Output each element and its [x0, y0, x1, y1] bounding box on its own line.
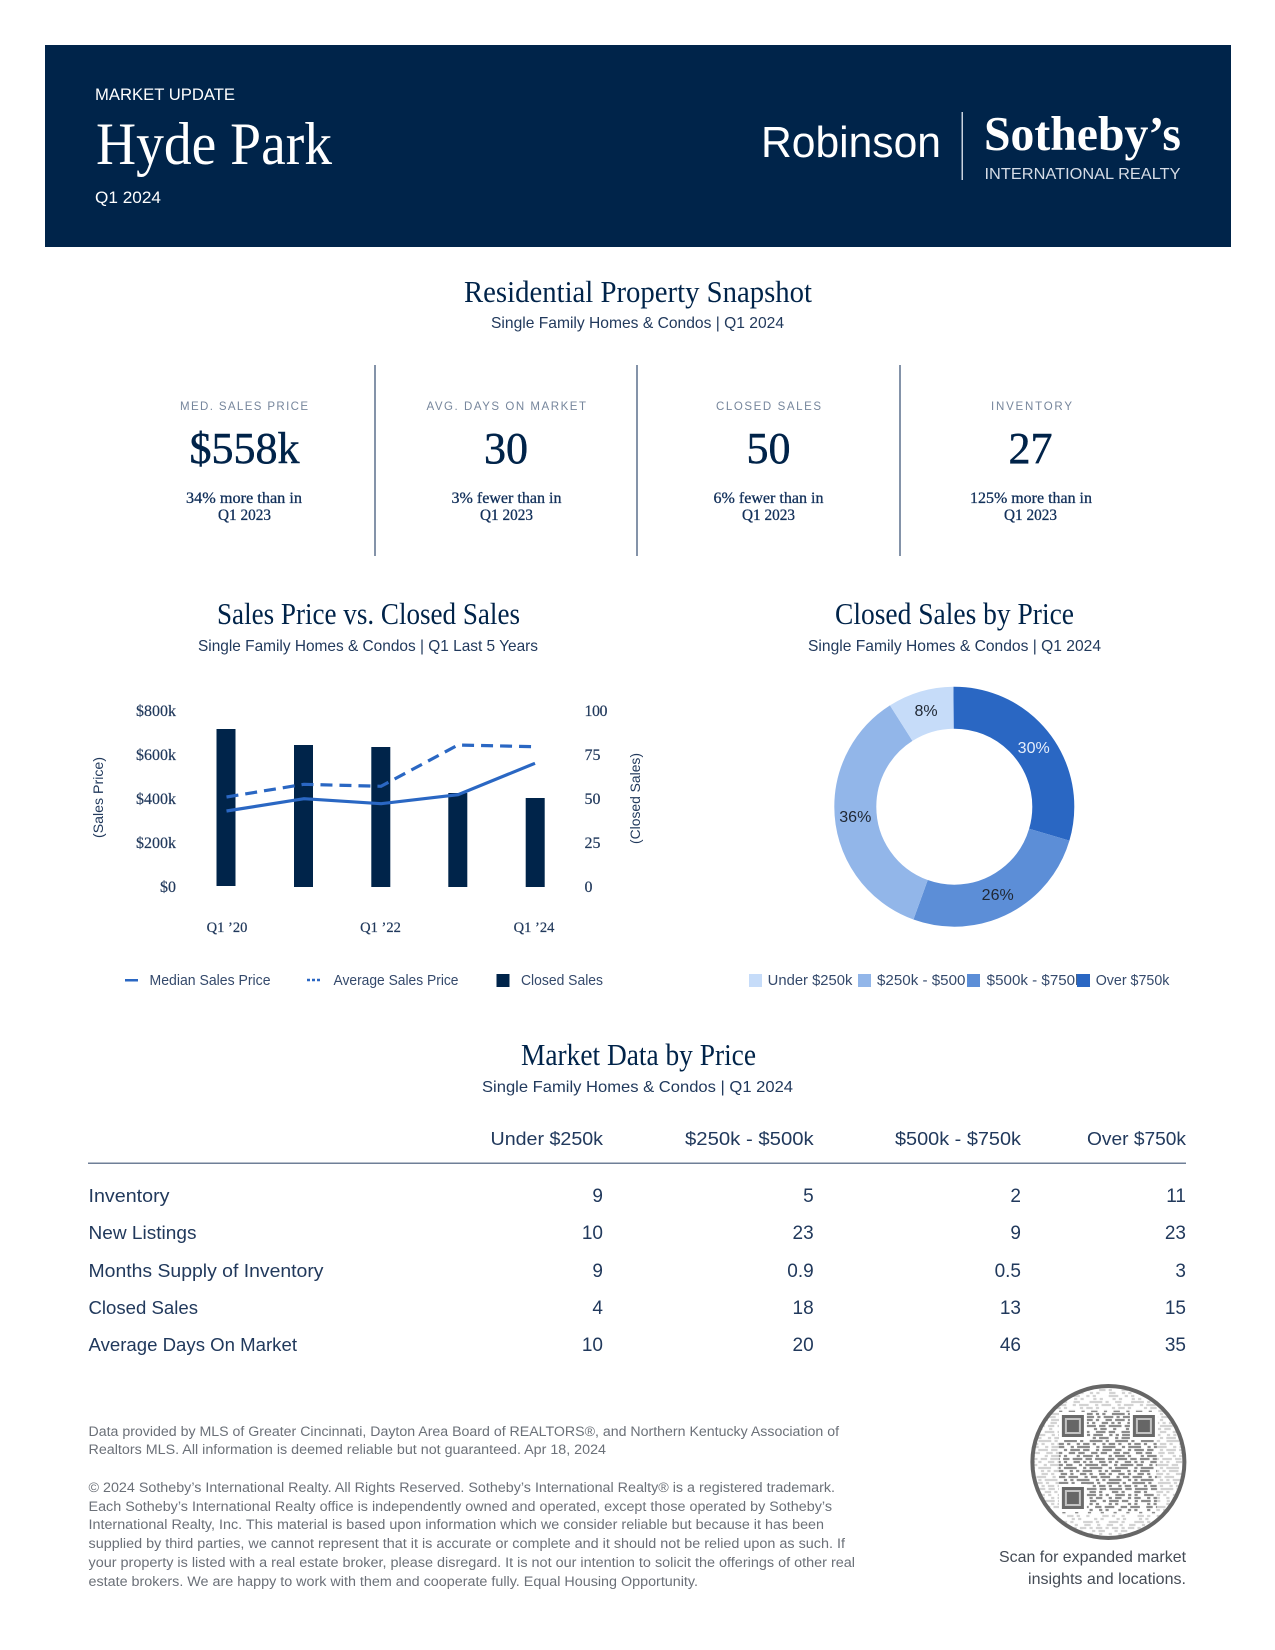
- row: new listings: 23: [793, 1223, 814, 1244]
- legal disclaimer: estate brokers. We are happy to work with them and cooperate fully. Equal Housing Opportunity.: [88, 1574, 698, 1589]
- row: average days on market: 46: [1000, 1335, 1021, 1356]
- x axis labels: Q1 ’20: [207, 920, 247, 936]
- right axis labels: 25: [584, 835, 600, 852]
- legal disclaimer: [88, 1480, 855, 1589]
- line: median sales price: [226, 763, 535, 811]
- combo chart: sales price vs closed sales: [91, 703, 643, 936]
- heading: sales price vs closed sales: Single Family Homes & Condos | Q1 Last 5 Years: [198, 638, 538, 655]
- stat: median sales price: Q1 2023: [218, 507, 271, 524]
- header banner: [45, 45, 1231, 247]
- legal disclaimer: © 2024 Sotheby’s International Realty. All Rights Reserved. Sotheby’s International Realty® is a registered trademark.: [88, 1480, 835, 1495]
- donut legend: Under $250k: [768, 973, 853, 989]
- row: average days on market: 35: [1165, 1335, 1186, 1356]
- table header row: [88, 1128, 1187, 1164]
- stat: inventory: 125% more than in: [970, 490, 1092, 507]
- row: inventory: [88, 1185, 1186, 1207]
- right axis title: (Closed Sales): [628, 753, 643, 844]
- stat dividers: [374, 365, 901, 556]
- row: closed sales: 13: [1000, 1298, 1021, 1319]
- stat: median sales price: [180, 401, 308, 524]
- donut legend: [749, 974, 1170, 987]
- data source note: [88, 1424, 839, 1457]
- row: new listings: 9: [1010, 1223, 1021, 1244]
- row: closed sales: Closed Sales: [88, 1297, 198, 1318]
- logo: Robinson Sotheby's International Realty: Robinson: [761, 118, 941, 167]
- right axis labels: 0: [584, 879, 592, 896]
- data table: market data by price: [88, 1128, 1187, 1356]
- donut percentage labels: 8%: [914, 703, 938, 720]
- row: months supply of inventory: Months Supply of Inventory: [88, 1260, 324, 1281]
- heading: sales price vs closed sales: [198, 596, 538, 655]
- donut percentage labels: 36%: [839, 809, 871, 826]
- stat: average days on market: 30: [484, 424, 528, 473]
- row: inventory: 11: [1166, 1186, 1186, 1207]
- row: months supply of inventory: 0.5: [995, 1261, 1021, 1282]
- table header row: $500k - $750k: [895, 1128, 1022, 1149]
- donut chart: closed sales by price: [839, 703, 1053, 906]
- right axis labels: 100: [584, 703, 608, 720]
- stat: inventory: INVENTORY: [991, 401, 1072, 413]
- row: average days on market: 20: [793, 1335, 814, 1356]
- bars: closed sales: [216, 729, 545, 887]
- stat: closed sales: CLOSED SALES: [716, 401, 821, 413]
- donut legend: $250k - $500k: [877, 973, 974, 989]
- chart legend: Average Sales Price: [334, 973, 458, 989]
- heading: closed sales by price: Closed Sales by Price: [835, 596, 1074, 631]
- heading: closed sales by price: [808, 596, 1101, 655]
- chart legend: Closed Sales: [521, 973, 603, 989]
- row: closed sales: 18: [793, 1298, 814, 1319]
- legal disclaimer: your property is listed with a real estate broker, please disregard. It is not our intention to solicit the offerings of other real: [88, 1555, 855, 1570]
- stat: closed sales: 50: [746, 424, 790, 473]
- stat: average days on market: [426, 401, 586, 524]
- row: inventory: 9: [592, 1186, 603, 1207]
- logo: Robinson Sotheby's International Realty: INTERNATIONAL REALTY: [984, 166, 1181, 183]
- stat: closed sales: Q1 2023: [742, 507, 795, 524]
- stat: inventory: [970, 401, 1092, 524]
- right axis labels: 75: [584, 747, 600, 764]
- line: average sales price: [226, 745, 535, 797]
- row: inventory: 2: [1010, 1186, 1021, 1207]
- left axis labels: $600k: [136, 747, 176, 764]
- heading: market data by price: [482, 1037, 793, 1096]
- table header row: $250k - $500k: [685, 1128, 815, 1149]
- heading: sales price vs closed sales: Sales Price vs. Closed Sales: [217, 596, 520, 631]
- chart legend: Median Sales Price: [150, 973, 270, 989]
- QR caption: [999, 1549, 1187, 1588]
- heading: residential property snapshot: Single Family Homes & Condos | Q1 2024: [491, 315, 784, 332]
- table header row: Under $250k: [490, 1128, 604, 1149]
- left axis labels: [136, 703, 176, 896]
- title: Hyde Park: Hyde Park: [96, 111, 332, 177]
- left axis labels: $400k: [136, 791, 176, 808]
- donut legend: Over $750k: [1096, 973, 1170, 989]
- row: closed sales: 15: [1165, 1298, 1186, 1319]
- stat: average days on market: AVG. DAYS ON MARKET: [426, 401, 586, 413]
- stat: inventory: Q1 2023: [1004, 507, 1057, 524]
- x axis labels: Q1 ’24: [514, 920, 555, 936]
- row: inventory: Inventory: [88, 1185, 170, 1206]
- logo: Robinson Sotheby's International Realty: [761, 106, 1181, 183]
- row: closed sales: 4: [592, 1298, 603, 1319]
- row: months supply of inventory: 3: [1175, 1261, 1186, 1282]
- data source note: Data provided by MLS of Greater Cincinnati, Dayton Area Board of REALTORS®, and Northern Kentucky Association of: [88, 1424, 839, 1439]
- QR caption: insights and locations.: [1028, 1571, 1186, 1588]
- donut legend: $500k - $750k: [987, 973, 1083, 989]
- heading: residential property snapshot: [464, 274, 812, 332]
- logo: Robinson Sotheby's International Realty: Sotheby’s: [984, 106, 1181, 161]
- stat: average days on market: 3% fewer than in: [452, 490, 562, 507]
- data source note: Realtors MLS. All information is deemed reliable but not guaranteed. Apr 18, 2024: [88, 1442, 607, 1457]
- legal disclaimer: supplied by third parties, we cannot represent that it is accurate or complete and it should not be relied upon as such. If: [88, 1536, 845, 1551]
- kicker: market update: MARKET UPDATE: [95, 85, 235, 104]
- row: new listings: 10: [582, 1223, 603, 1244]
- period label: Q1 2024: [95, 188, 161, 207]
- right axis labels: 50: [584, 791, 600, 808]
- stat: closed sales: 6% fewer than in: [714, 490, 824, 507]
- row: months supply of inventory: 9: [592, 1261, 603, 1282]
- stat: average days on market: Q1 2023: [480, 507, 533, 524]
- left axis title: (Sales Price): [91, 757, 106, 838]
- row: average days on market: [88, 1334, 1186, 1356]
- x axis labels: [207, 920, 555, 936]
- chart legend: [125, 973, 603, 989]
- stat: median sales price: 34% more than in: [186, 490, 302, 507]
- donut percentage labels: [839, 703, 1050, 904]
- row: inventory: 5: [803, 1186, 814, 1207]
- stat: inventory: 27: [1008, 424, 1052, 473]
- row: closed sales: [88, 1297, 1186, 1319]
- left axis labels: $0: [160, 879, 176, 896]
- left axis labels: $200k: [136, 835, 176, 852]
- legal disclaimer: Each Sotheby’s International Realty office is independently owned and operated, except those operated by Sotheby’s: [88, 1499, 832, 1514]
- QR code badge: [1028, 1380, 1190, 1544]
- heading: closed sales by price: Single Family Homes & Condos | Q1 2024: [808, 638, 1101, 655]
- row: months supply of inventory: [88, 1260, 1186, 1282]
- QR circular border: [1032, 1386, 1184, 1538]
- heading: market data by price: Single Family Homes & Condos | Q1 2024: [482, 1079, 793, 1096]
- QR finder patterns: [1059, 1412, 1158, 1512]
- table header row: Over $750k: [1087, 1128, 1187, 1149]
- heading: residential property snapshot: Residential Property Snapshot: [464, 274, 812, 309]
- stat: closed sales: [714, 401, 824, 524]
- donut percentage labels: 30%: [1018, 740, 1050, 757]
- legal disclaimer: International Realty, Inc. This material is based upon information which we consider reliable but because it has been: [88, 1517, 824, 1532]
- row: new listings: [88, 1222, 1186, 1244]
- row: average days on market: 10: [582, 1335, 603, 1356]
- right axis labels: [584, 703, 608, 896]
- row: average days on market: Average Days On Market: [88, 1334, 297, 1355]
- row: months supply of inventory: 0.9: [787, 1261, 814, 1282]
- QR caption: Scan for expanded market: [999, 1549, 1187, 1566]
- stat: median sales price: $558k: [190, 424, 300, 473]
- left axis labels: $800k: [136, 703, 176, 720]
- stat: median sales price: MED. SALES PRICE: [180, 401, 308, 413]
- x axis labels: Q1 ’22: [360, 920, 401, 936]
- row: new listings: New Listings: [88, 1222, 196, 1243]
- heading: market data by price: Market Data by Price: [521, 1037, 756, 1072]
- row: new listings: 23: [1165, 1223, 1186, 1244]
- donut percentage labels: 26%: [982, 887, 1014, 904]
